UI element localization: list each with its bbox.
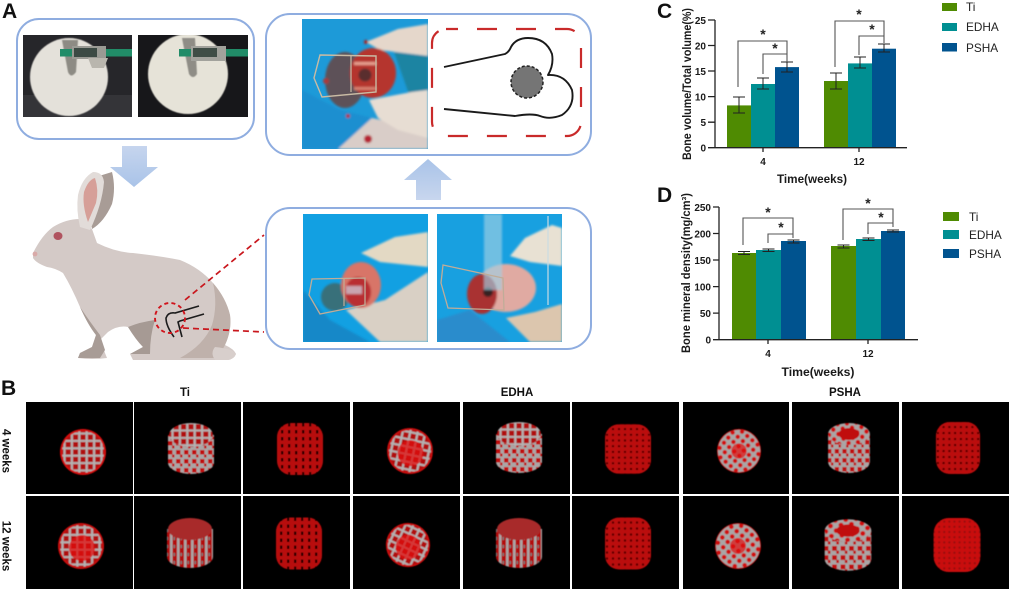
legend: Ti bbox=[966, 0, 975, 14]
front ear bbox=[77, 172, 104, 230]
y axis title: Bone mineral density(mg/cm³) bbox=[681, 193, 693, 353]
arrow: up to schematic bbox=[404, 159, 452, 200]
y tick labels: 100 bbox=[694, 283, 711, 294]
y tick labels: 200 bbox=[694, 230, 711, 240]
error bars bbox=[733, 44, 890, 113]
PSHA group scans bbox=[715, 422, 980, 572]
body bbox=[33, 219, 236, 360]
bar chart D: bone mineral density bbox=[681, 193, 1002, 379]
x tick labels bbox=[760, 157, 865, 168]
significance stars: * bbox=[778, 219, 784, 235]
y tick labels: 15 bbox=[695, 67, 706, 78]
bars bbox=[727, 49, 896, 148]
y tick labels: 20 bbox=[695, 42, 706, 52]
dashed circle bbox=[155, 303, 185, 333]
y tick labels: 10 bbox=[695, 93, 706, 104]
panel: surgery photos bbox=[266, 208, 591, 349]
column heading EDHA: EDHA bbox=[501, 387, 533, 399]
significance stars: * bbox=[865, 195, 871, 211]
dashed frame bbox=[432, 29, 581, 136]
significance brackets bbox=[743, 209, 893, 245]
y tick labels: 0 bbox=[700, 144, 706, 155]
axes bbox=[713, 207, 918, 344]
significance stars: * bbox=[878, 209, 884, 225]
bars bbox=[732, 231, 905, 340]
x tick labels: 4 bbox=[760, 157, 766, 168]
x tick labels: 12 bbox=[853, 157, 865, 168]
y tick labels: 150 bbox=[694, 256, 711, 267]
axes bbox=[708, 20, 907, 152]
black image tiles, row 2 bbox=[26, 496, 1009, 589]
illustration: rabbit bbox=[33, 172, 236, 360]
legend: PSHA bbox=[969, 247, 1001, 261]
y tick labels: 25 bbox=[695, 16, 706, 27]
x axis title: Time(weeks) bbox=[782, 367, 855, 379]
x tick labels bbox=[765, 349, 874, 360]
panel label A: A bbox=[2, 0, 17, 23]
hind foot highlight bbox=[212, 347, 236, 360]
significance stars: * bbox=[765, 204, 771, 220]
legend: EDHA bbox=[969, 228, 1002, 242]
y tick labels: 0 bbox=[705, 336, 711, 347]
EDHA group scans bbox=[379, 422, 651, 574]
y axis title: Bone volume/Total volume(%) bbox=[682, 8, 694, 160]
black image tiles, row 1 bbox=[26, 402, 1009, 494]
legend bbox=[943, 210, 1002, 261]
back ear bbox=[88, 172, 114, 229]
y tick labels: 50 bbox=[700, 309, 711, 320]
significance stars: * bbox=[760, 26, 766, 42]
y tick labels bbox=[694, 203, 711, 347]
photo: caliper on disc 1 bbox=[23, 35, 132, 117]
bone outline bbox=[444, 38, 573, 118]
Ti group scans bbox=[58, 423, 323, 570]
bar chart C: bone volume bbox=[682, 0, 999, 186]
column heading PSHA: PSHA bbox=[829, 387, 861, 399]
photo: exposed femur bbox=[303, 214, 428, 342]
schematic: femoral condyle with defect bbox=[432, 29, 581, 136]
bone defect bbox=[511, 66, 543, 98]
x axis title: Time(weeks) bbox=[777, 174, 847, 186]
panel label D: D bbox=[657, 184, 672, 207]
panel B: micro-CT image grid bbox=[26, 402, 1009, 589]
legend: PSHA bbox=[966, 41, 998, 55]
eye bbox=[54, 232, 62, 240]
panel label B: B bbox=[1, 377, 16, 400]
x tick labels: 12 bbox=[862, 349, 874, 360]
photo: caliper on disc 2 bbox=[138, 34, 248, 117]
implant lines bbox=[166, 306, 204, 337]
legend bbox=[942, 0, 999, 55]
legend: Ti bbox=[969, 210, 978, 224]
callout lines: rabbit to surgery panel bbox=[183, 235, 264, 332]
x tick labels: 4 bbox=[765, 349, 771, 360]
panel label C: C bbox=[657, 0, 672, 23]
significance stars: * bbox=[869, 21, 875, 37]
y tick labels bbox=[695, 16, 706, 155]
hip shading bbox=[180, 283, 230, 358]
photo: implanted scaffold bbox=[302, 19, 428, 149]
belly shadow bbox=[128, 320, 155, 354]
error bars bbox=[738, 230, 899, 254]
arrow: down to rabbit bbox=[110, 146, 158, 187]
panel: surgical defect and schematic bbox=[266, 14, 591, 155]
significance brackets bbox=[738, 21, 884, 87]
y tick labels: 250 bbox=[694, 203, 711, 214]
panel: scaffold caliper measurement bbox=[17, 19, 254, 139]
chest shadow bbox=[78, 307, 105, 358]
photo: drilled defect with ruler bbox=[437, 214, 562, 342]
legend: EDHA bbox=[966, 20, 999, 34]
significance stars: * bbox=[856, 6, 862, 22]
y tick labels: 5 bbox=[700, 118, 706, 129]
column heading Ti: Ti bbox=[180, 387, 190, 399]
significance stars bbox=[765, 195, 884, 235]
significance stars: * bbox=[772, 40, 778, 56]
significance stars bbox=[760, 6, 875, 56]
nose bbox=[33, 252, 37, 256]
